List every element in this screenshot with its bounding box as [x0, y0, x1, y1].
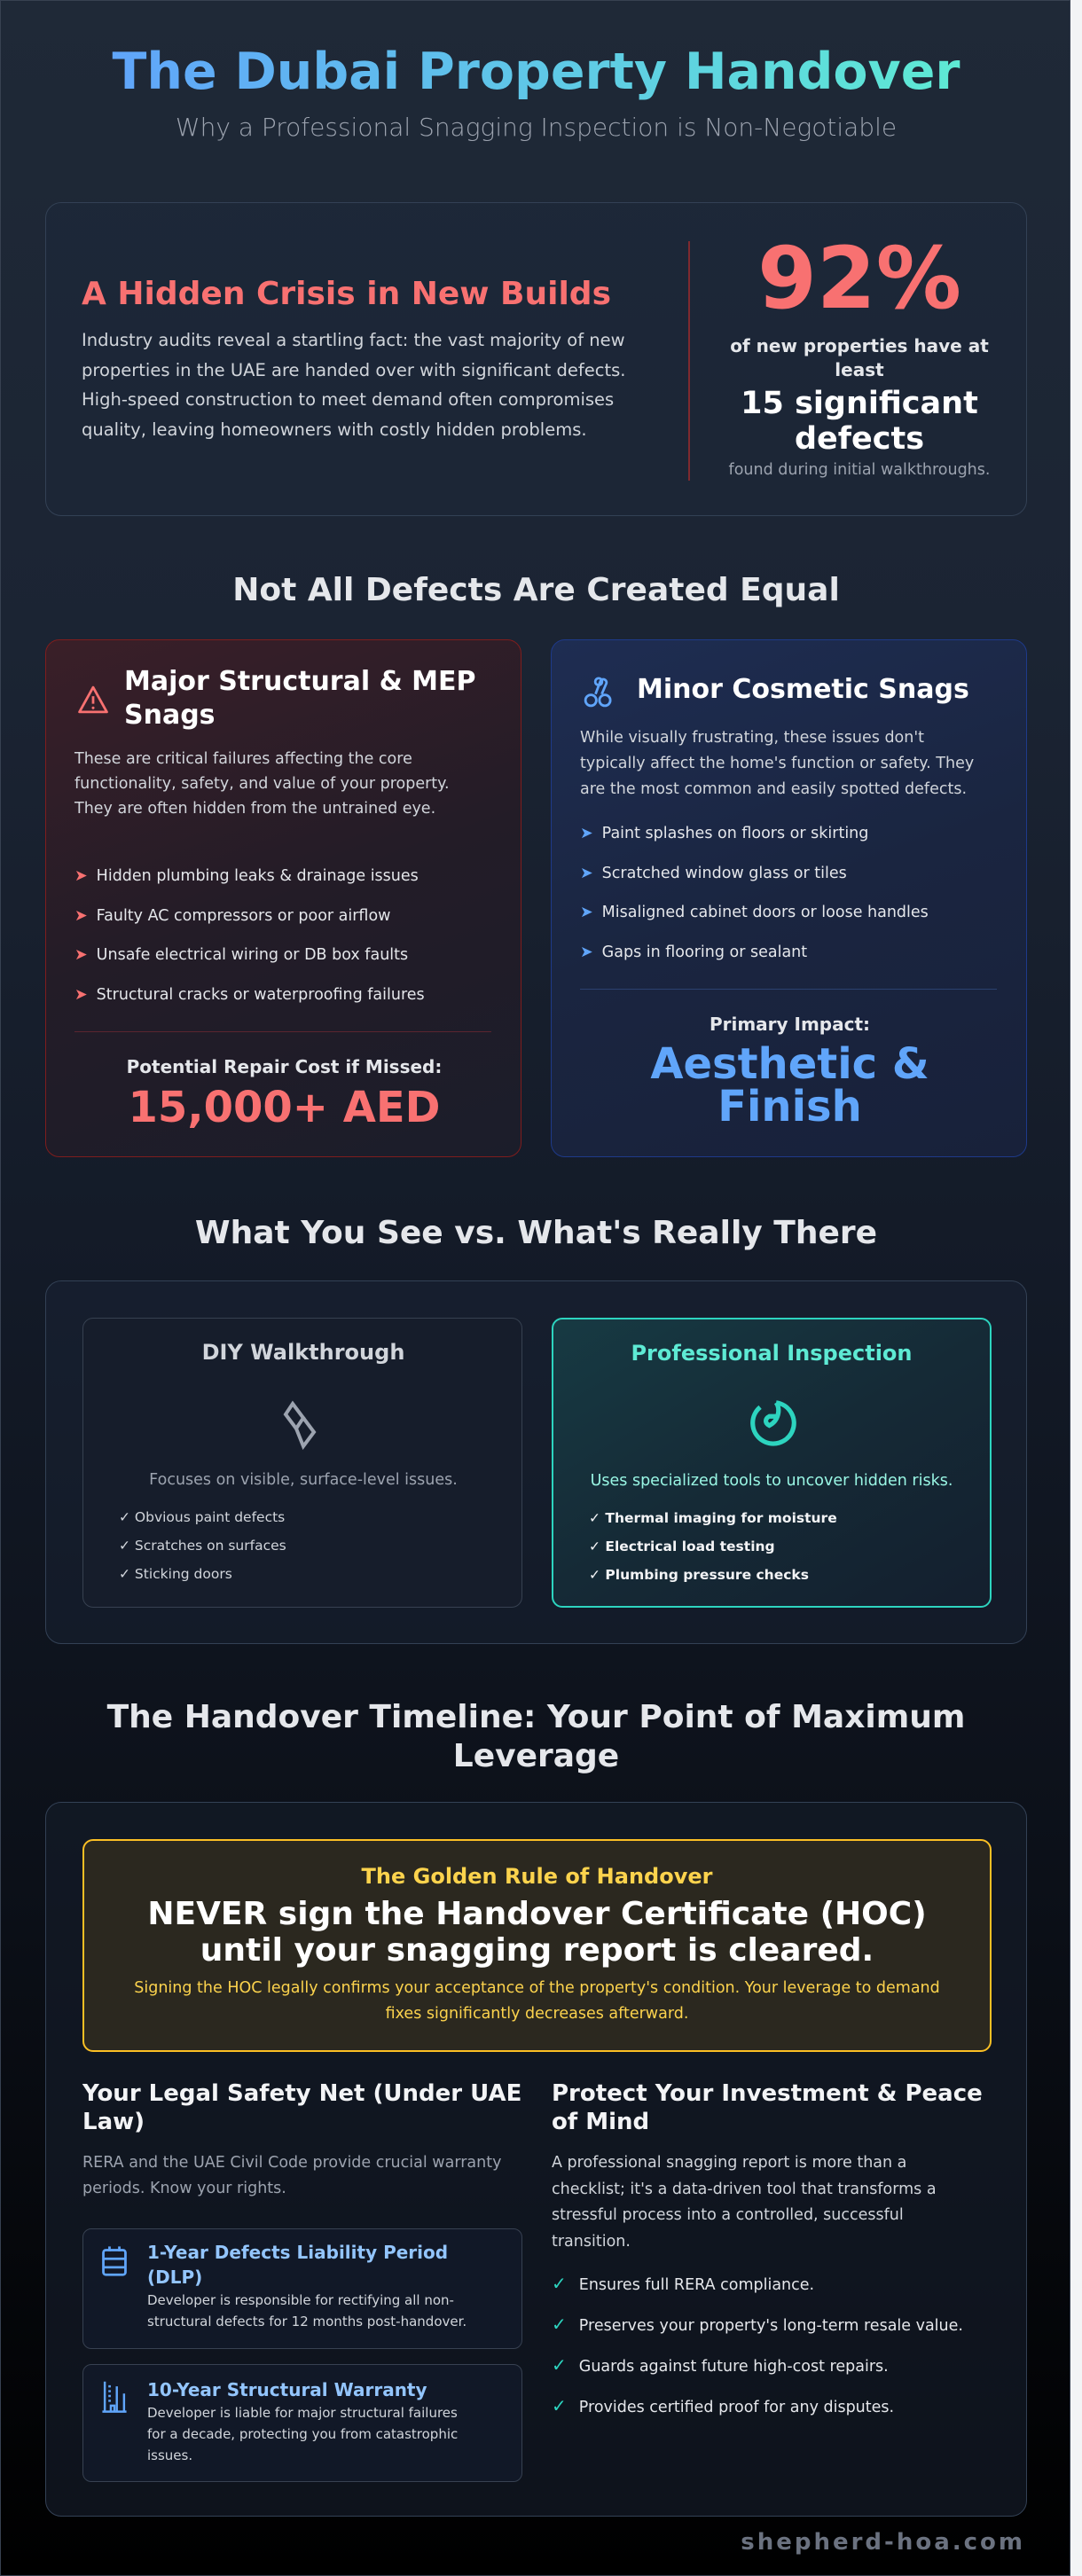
panel: hidden crisis — [45, 202, 1027, 516]
panel: timeline — [45, 1802, 1027, 2517]
card: structural warranty — [82, 2364, 522, 2482]
icon: building — [102, 2382, 127, 2413]
stat: 92% — [729, 229, 990, 479]
list: DIY checks: ✓ Scratches on surfaces — [119, 1538, 286, 1554]
list: professional checks: ✓ Thermal imaging for moisture — [589, 1510, 837, 1526]
list: benefits: ✓ Ensures full RERA compliance. — [552, 2273, 814, 2294]
heading: not all defects: Not All Defects Are Created Equal — [232, 572, 840, 608]
list: minor defects: ➤ Paint splashes on floors or skirting — [580, 825, 868, 842]
heading: hidden crisis: A Hidden Crisis in New Builds — [82, 276, 611, 312]
icon: eraser — [284, 1401, 316, 1450]
text: DIY description: Focuses on visible, surface-level issues. — [149, 1471, 458, 1489]
icon: paint — [584, 677, 612, 708]
list: major defects: ➤ Structural cracks or waterproofing failures — [74, 986, 425, 1004]
stat: 92%: of new properties have at least — [730, 335, 989, 380]
stat: 92%: 92% — [757, 229, 961, 328]
heading: legal: Your Legal Safety Net (Under UAE Law) — [82, 2080, 521, 2135]
card: DLP — [82, 2228, 522, 2349]
icon: thermal — [750, 1400, 796, 1446]
callout: golden rule — [82, 1839, 992, 2052]
stat: 92%: found during initial walkthroughs. — [729, 461, 990, 479]
list: major defects — [74, 867, 425, 1004]
heading: what you see: What You See vs. What's Really There — [195, 1215, 877, 1251]
text: professional description: Uses specialized tools to uncover hidden risks. — [591, 1472, 953, 1490]
list: DIY checks: ✓ Sticking doors — [119, 1566, 232, 1582]
stat: 92%: 15 significant defects — [741, 386, 978, 457]
list: major defects: ➤ Faulty AC compressors or poor airflow — [74, 906, 390, 924]
list: professional checks — [589, 1510, 837, 1583]
list: DIY checks: ✓ Obvious paint defects — [119, 1509, 285, 1525]
list: benefits: ✓ Preserves your property's long-term resale value. — [552, 2314, 963, 2335]
heading: protect: Protect Your Investment & Peace of Mind — [552, 2080, 983, 2135]
card: DLP: Developer is responsible for rectifying all non-structural defects for 12 months post-handover. — [147, 2292, 467, 2329]
list: benefits: ✓ Provides certified proof for any disputes. — [552, 2395, 894, 2416]
subtitle: Why a Professional Snagging Inspection is Non-Negotiable — [176, 113, 897, 142]
list: major defects: ➤ Unsafe electrical wiring or DB box faults — [74, 946, 408, 964]
heading: minor snags: Minor Cosmetic Snags — [637, 674, 969, 705]
icon: warning — [78, 686, 108, 713]
footer: site name: shepherd-hoa.com — [741, 2529, 1025, 2556]
callout: primary impact: Aesthetic & Finish — [650, 1039, 929, 1131]
callout: golden rule: The Golden Rule of Handover — [362, 1864, 712, 1889]
list: minor defects — [580, 825, 929, 961]
text: major description: These are critical failures affecting the core functionality, safety, and value of your property. They are often hidden from the untrained eye. — [74, 750, 450, 818]
list: major defects: ➤ Hidden plumbing leaks & drainage issues — [74, 867, 419, 885]
title: The Dubai Property Handover — [112, 43, 960, 101]
card: professional inspection — [552, 1318, 992, 1608]
callout: golden rule: Signing the HOC legally confirms your acceptance of the property's condition. Your leverage to demand fixes significantly decreases afterward. — [134, 1979, 940, 2023]
card: DLP: 1-Year Defects Liability Period (DLP) — [147, 2242, 448, 2288]
callout: primary impact: Primary Impact: — [710, 1014, 870, 1035]
text: protect description: A professional snagging report is more than a checklist; it's a data-driven tool that transforms a stressful process into a controlled, successful transition. — [552, 2154, 937, 2251]
list: professional checks: ✓ Electrical load testing — [589, 1539, 775, 1554]
heading: major snags: Major Structural & MEP Snags — [124, 666, 476, 731]
card: structural warranty: Developer is liable for major structural failures for a decade, protecting you from catastrophic issues. — [147, 2405, 458, 2463]
list: DIY checks — [119, 1509, 286, 1582]
panel: minor cosmetic snags — [551, 639, 1027, 1157]
card: structural warranty: 10-Year Structural Warranty — [147, 2379, 427, 2400]
list: benefits: ✓ Guards against future high-cost repairs. — [552, 2354, 889, 2376]
callout: golden rule: NEVER sign the Handover Certificate (HOC) — [147, 1896, 927, 1932]
callout: repair cost: Potential Repair Cost if Missed: — [127, 1056, 442, 1077]
column: legal safety net — [82, 2080, 522, 2482]
list: minor defects: ➤ Gaps in flooring or sealant — [580, 943, 807, 961]
callout: repair cost — [127, 1056, 442, 1132]
panel: major structural snags — [45, 639, 521, 1157]
list: benefits — [552, 2273, 963, 2416]
list: minor defects: ➤ Misaligned cabinet doors or loose handles — [580, 904, 929, 921]
heading: professional: Professional Inspection — [631, 1341, 913, 1366]
text: minor description: While visually frustrating, these issues don't typically affect the home's function or safety. They are the most common and easily spotted defects. — [580, 729, 974, 798]
heading: DIY: DIY Walkthrough — [202, 1340, 404, 1365]
icon: calendar — [102, 2246, 127, 2276]
callout: golden rule: until your snagging report is cleared. — [200, 1932, 874, 1969]
column: protect investment — [552, 2080, 983, 2416]
text: crisis description: Industry audits reveal a startling fact: the vast majority of new properties in the UAE are handed over with significant defects. High-speed construction to meet demand often compromises quality, leaving homeowners with costly hidden problems. — [82, 330, 625, 440]
heading: timeline: The Handover Timeline: Your Point of Maximum Leverage — [107, 1699, 965, 1774]
card: DIY walkthrough — [82, 1318, 522, 1608]
text: legal description: RERA and the UAE Civil Code provide crucial warranty periods. Know your rights. — [82, 2154, 501, 2197]
callout: repair cost: 15,000+ AED — [129, 1083, 440, 1132]
panel: comparison — [45, 1280, 1027, 1644]
list: professional checks: ✓ Plumbing pressure checks — [589, 1567, 809, 1583]
list: minor defects: ➤ Scratched window glass or tiles — [580, 864, 847, 881]
